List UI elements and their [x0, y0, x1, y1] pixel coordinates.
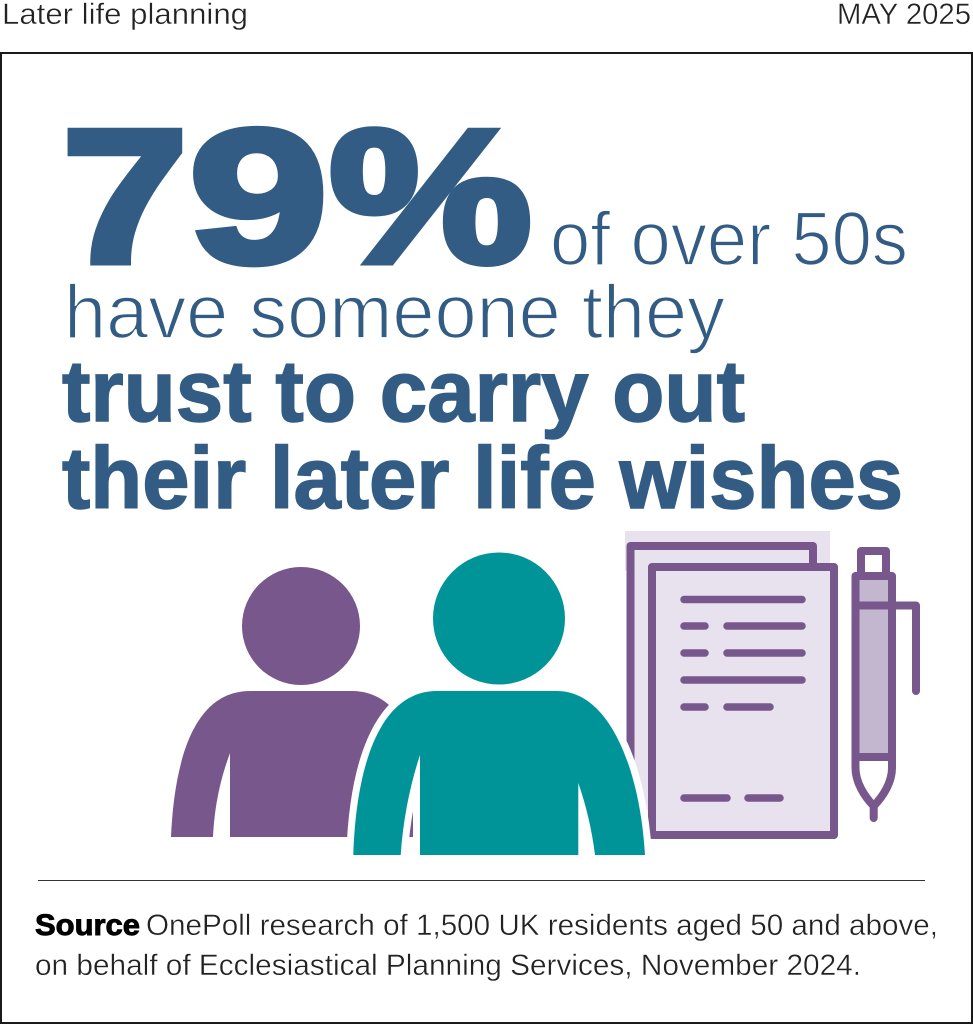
headline statistic: 79%: % [329, 91, 532, 303]
headline statistic: 79%: 9 [189, 91, 328, 303]
pen clip [856, 606, 916, 691]
headline statistic: 79% [62, 91, 532, 303]
icon: purple person [171, 567, 431, 837]
source label: Source [35, 909, 140, 942]
pen nib line [870, 806, 878, 818]
headline text: of over 50s: of over 50s [550, 197, 908, 282]
icon: teal person [353, 552, 645, 855]
divider [38, 880, 925, 882]
headline statistic: 79%: 7 [62, 91, 188, 303]
headline bold: trust to carry out: trust to carry out [62, 343, 745, 440]
icon: pen [856, 551, 916, 818]
headline bold: their later life wishes: their later life wishes [62, 430, 903, 527]
document text lines [684, 600, 802, 798]
purple head [242, 567, 360, 685]
icon: stacked documents [625, 531, 834, 835]
teal head [433, 552, 565, 684]
headline text: have someone they: have someone they [64, 270, 725, 355]
pen cap [861, 551, 886, 577]
source text line 2: on behalf of Ecclesiastical Planning Services, November 2024. [35, 949, 861, 982]
pen tip [856, 757, 892, 806]
back sheet [630, 546, 813, 835]
front sheet [652, 567, 834, 835]
source text line 1: OnePoll research of 1,500 UK residents aged 50 and above, [146, 909, 938, 942]
teal body [353, 691, 645, 855]
purple body [171, 691, 431, 837]
pen barrel [856, 576, 892, 757]
